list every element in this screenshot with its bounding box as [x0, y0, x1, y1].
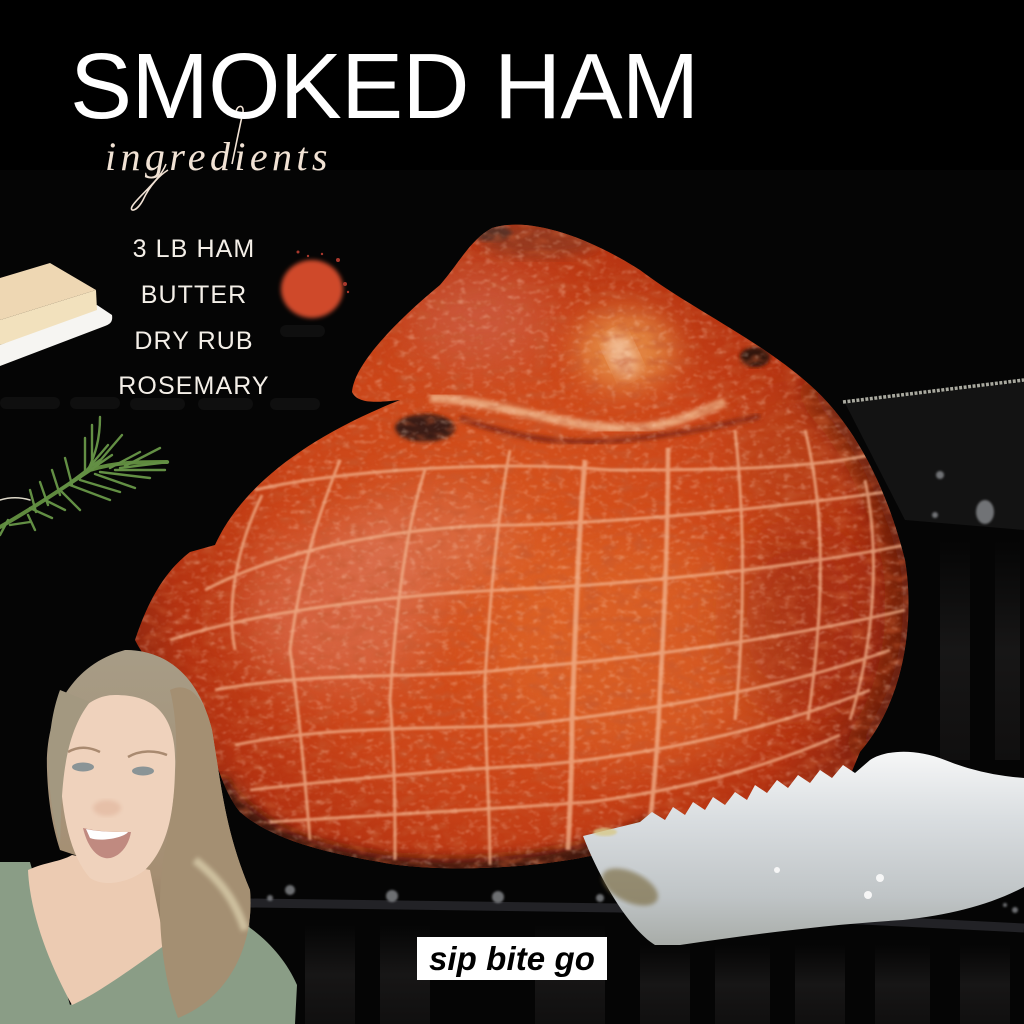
- burnt spot on top piece: [740, 347, 770, 367]
- eyebrows: [68, 748, 167, 757]
- seam shadow: [460, 416, 760, 442]
- face: [60, 695, 175, 883]
- icon: rosemary sprig: [0, 417, 168, 535]
- hair back: [47, 650, 251, 1024]
- title: SMOKED HAM: [70, 34, 699, 138]
- nose shadow: [93, 800, 121, 816]
- residue on tong tip: [596, 861, 664, 913]
- ingredient list: [118, 235, 270, 400]
- ingredient: butter: BUTTER: [141, 281, 247, 309]
- script flourishes of subtitle: [131, 106, 243, 210]
- left hair strand: [49, 690, 90, 845]
- ham: [130, 215, 920, 875]
- eyes: [72, 762, 94, 772]
- logo: sip bite go: sip bite go: [429, 940, 595, 977]
- icon: butter on dish: [0, 263, 112, 366]
- chest skin: [28, 855, 165, 1005]
- glaze speckle dark: [130, 215, 920, 875]
- burnt spot near seam: [395, 414, 455, 442]
- tongs: [583, 752, 1024, 945]
- script subtitle: ingredients: [105, 134, 332, 179]
- icon: dry rub pile: [281, 250, 349, 318]
- front hair: [160, 687, 251, 1018]
- ingredient: rosemary: ROSEMARY: [118, 372, 270, 400]
- mouth: [83, 828, 131, 858]
- header band: [0, 0, 1024, 170]
- right edge shadow: [810, 385, 909, 752]
- teeth: [86, 829, 128, 840]
- cut seam pale band: [430, 398, 725, 428]
- glaze speckle light: [130, 215, 920, 875]
- bottom char edge: [215, 780, 660, 870]
- score marks: [170, 430, 905, 865]
- ingredient: dry rub: DRY RUB: [134, 327, 254, 355]
- ham silhouette: [135, 225, 909, 868]
- sweater: [0, 862, 297, 1024]
- ham surface shading: [130, 215, 920, 875]
- woman portrait: [0, 650, 297, 1024]
- ingredient: ham: 3 LB HAM: [133, 235, 255, 263]
- hair highlight: [195, 860, 245, 930]
- residue spot: [593, 828, 617, 836]
